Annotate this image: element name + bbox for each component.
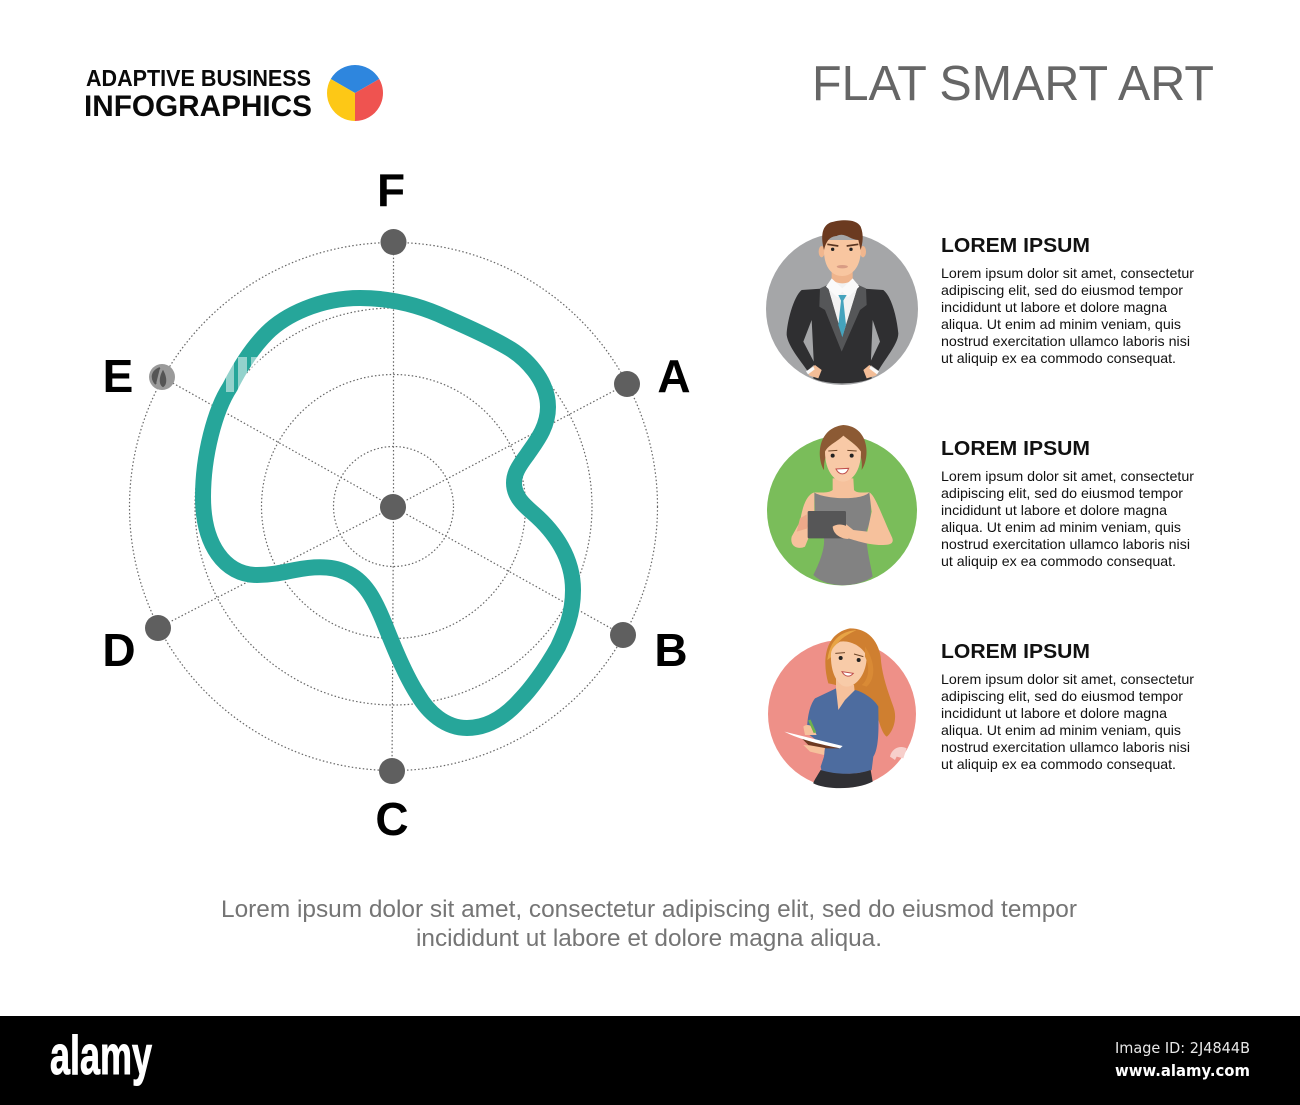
axis labels (102, 164, 691, 845)
text block 1: Lorem ipsum dolor sit amet, consectetur (941, 266, 1194, 281)
text block 2: nostrud exercitation ullamco laboris nisi (941, 537, 1190, 552)
text block 1: aliqua. Ut enim ad minim veniam, quis (941, 317, 1181, 332)
text block 2 (941, 438, 1194, 569)
axis labels: F (377, 164, 405, 216)
text block 2: aliqua. Ut enim ad minim veniam, quis (941, 520, 1181, 535)
text block 2: LOREM IPSUM (941, 438, 1090, 460)
text block 3: aliqua. Ut enim ad minim veniam, quis (941, 723, 1181, 738)
axis labels: C (375, 793, 409, 845)
footer description: incididunt ut labore et dolore magna aliqua. (416, 925, 882, 952)
text block 2: Lorem ipsum dolor sit amet, consectetur (941, 469, 1194, 484)
text block 3: ut aliquip ex ea commodo consequat. (941, 757, 1176, 772)
logo: adaptive business infographics: INFOGRAPHICS (84, 90, 312, 123)
teal data curve (203, 298, 573, 728)
watermark bar: www.alamy.com (1115, 1061, 1250, 1080)
portrait: woman with notebook (768, 628, 916, 788)
text block 2: adipiscing elit, sed do eiusmod tempor (941, 486, 1183, 501)
radar chart (102, 164, 691, 845)
logo: adaptive business infographics: ADAPTIVE BUSINESS (86, 65, 311, 91)
logo: adaptive business infographics (84, 65, 383, 123)
portrait: man in suit (766, 220, 918, 385)
text block 3 (941, 641, 1194, 772)
axis labels: D (102, 624, 136, 676)
footer description (221, 896, 1077, 952)
text block 1: nostrud exercitation ullamco laboris nisi (941, 334, 1190, 349)
text block 1: adipiscing elit, sed do eiusmod tempor (941, 283, 1183, 298)
text block 1 (941, 235, 1194, 366)
text block 3: LOREM IPSUM (941, 641, 1090, 663)
text block 1: ut aliquip ex ea commodo consequat. (941, 351, 1176, 366)
axis dots (145, 229, 640, 784)
text block 1: incididunt ut labore et dolore magna (941, 300, 1167, 315)
text block 3: adipiscing elit, sed do eiusmod tempor (941, 689, 1183, 704)
text block 2: incididunt ut labore et dolore magna (941, 503, 1167, 518)
watermark bar: Image ID: 2J4844B (1115, 1039, 1250, 1057)
watermark bar: alamy (50, 1024, 152, 1086)
text block 3: Lorem ipsum dolor sit amet, consectetur (941, 672, 1194, 687)
axis labels: E (103, 350, 133, 402)
title: FLAT SMART ART (812, 57, 1214, 111)
text block 3: nostrud exercitation ullamco laboris nisi (941, 740, 1190, 755)
watermark stripes on curve (226, 357, 260, 392)
axis labels: B (654, 624, 688, 676)
text block 1: LOREM IPSUM (941, 235, 1090, 257)
axis labels: A (657, 350, 691, 402)
footer description: Lorem ipsum dolor sit amet, consectetur adipiscing elit, sed do eiusmod tempor (221, 896, 1077, 923)
text block 3: incididunt ut labore et dolore magna (941, 706, 1167, 721)
watermark bar (0, 1016, 1300, 1105)
text block 2: ut aliquip ex ea commodo consequat. (941, 554, 1176, 569)
portrait: woman with tablet (767, 425, 917, 586)
